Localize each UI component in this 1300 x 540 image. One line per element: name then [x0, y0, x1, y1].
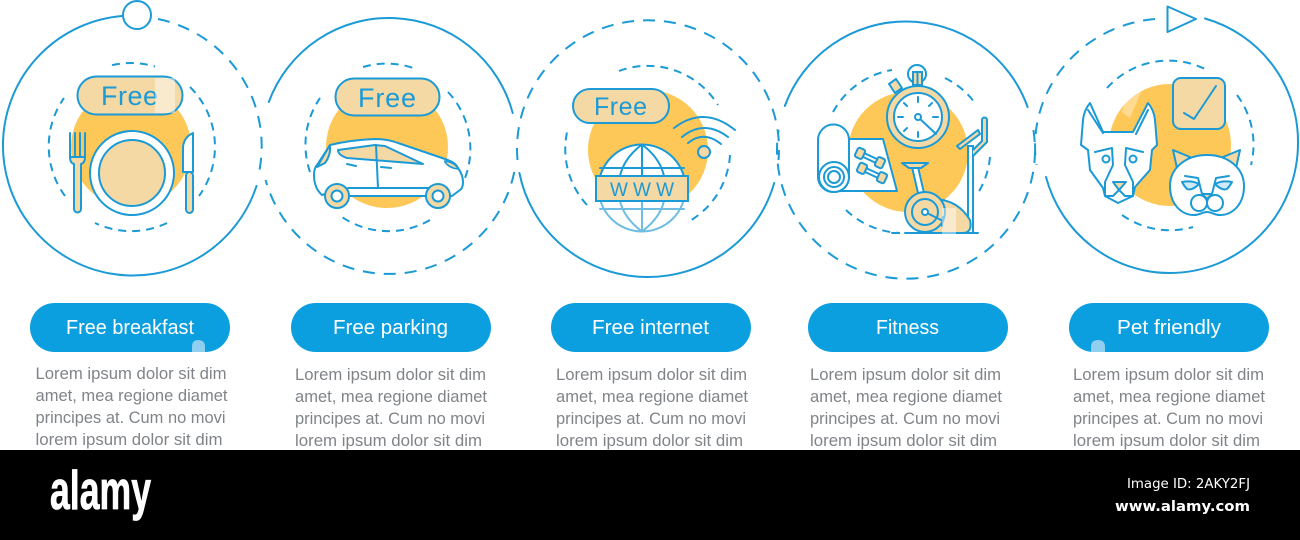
panel: free internet graphic	[517, 20, 779, 277]
body text 4: Lorem ipsum dolor sit dim	[810, 366, 1001, 384]
body text 4: amet, mea regione diamet	[810, 388, 1002, 406]
panel: free parking graphic	[266, 18, 514, 274]
body text 2: Lorem ipsum dolor sit dim	[295, 366, 486, 384]
label pill 1	[30, 303, 230, 352]
body text 1: Lorem ipsum dolor sit dim	[36, 365, 226, 383]
column: free internet	[551, 303, 753, 450]
icon: globe	[598, 144, 686, 232]
body text 3: amet, mea regione diamet	[556, 388, 748, 406]
free tag 3: Free	[594, 93, 647, 121]
icon: knife	[183, 133, 193, 213]
body text 3: lorem ipsum dolor sit dim	[556, 432, 743, 450]
icon: yoga mat	[818, 124, 897, 192]
yellow backdrop 1	[71, 87, 191, 207]
icon: stopwatch	[887, 65, 949, 148]
outer ring 5	[1035, 18, 1298, 273]
column: pet friendly	[1069, 303, 1270, 450]
body text 5: amet, mea regione diamet	[1073, 388, 1265, 406]
body text 2: amet, mea regione diamet	[295, 388, 487, 406]
outer ring 3	[517, 20, 779, 277]
www banner: WWW	[610, 180, 674, 201]
outer ring 2	[266, 18, 514, 274]
start marker circle	[123, 1, 151, 29]
yellow backdrop 5	[1109, 84, 1231, 206]
inner dashed ring 3	[565, 66, 730, 222]
free tag 1	[78, 76, 182, 114]
icon: fork	[70, 133, 85, 212]
icon: checkbox	[1173, 78, 1225, 129]
body text 5: principes at. Cum no movi	[1073, 410, 1263, 428]
column: free parking	[291, 303, 492, 450]
website: www.alamy.com	[1115, 499, 1250, 515]
body text 2: principes at. Cum no movi	[295, 410, 485, 428]
column: fitness	[808, 303, 1008, 450]
body text 4: lorem ipsum dolor sit dim	[810, 432, 997, 450]
free tag 2: Free	[358, 83, 416, 113]
inner dashed ring 5	[1107, 61, 1254, 230]
label pill 5	[1069, 303, 1269, 352]
label pill 3: Free internet	[592, 317, 709, 339]
yellow backdrop 2	[326, 86, 448, 208]
body text 1: lorem ipsum dolor sit dim	[36, 431, 222, 449]
free tag 1: Free	[101, 81, 158, 111]
yellow backdrop 3	[588, 90, 708, 210]
panel: free breakfast graphic	[3, 1, 262, 276]
body text 3: principes at. Cum no movi	[556, 410, 746, 428]
icon: cat	[1170, 150, 1244, 215]
inner dashed ring 2	[305, 64, 470, 231]
outer ring 4	[777, 21, 1035, 279]
label pill 3	[551, 303, 751, 352]
icon: wifi	[674, 117, 735, 158]
label pill 2: Free parking	[333, 317, 448, 339]
label pill 4	[808, 303, 1008, 352]
free tag 3	[573, 89, 669, 123]
outer ring 1	[3, 16, 262, 276]
label pill 5: Pet friendly	[1117, 317, 1221, 339]
logo: alamy	[50, 459, 151, 521]
icon: car	[314, 139, 463, 208]
icon: dog	[1081, 92, 1157, 203]
label pill 2	[291, 303, 491, 352]
footer bar	[0, 450, 1300, 540]
body text 2: lorem ipsum dolor sit dim	[295, 432, 482, 450]
free tag 2	[336, 78, 440, 116]
body text 1: principes at. Cum no movi	[36, 409, 226, 427]
yellow backdrop 4	[848, 92, 968, 212]
www banner	[596, 176, 688, 201]
body text 5: Lorem ipsum dolor sit dim	[1073, 366, 1264, 384]
inner dashed ring 4	[833, 70, 990, 233]
body text 4: principes at. Cum no movi	[810, 410, 1000, 428]
inner dashed ring 1	[49, 63, 215, 231]
icon: dumbbells	[854, 147, 888, 184]
icon: exercise bike	[892, 118, 987, 234]
image id: Image ID: 2AKY2FJ	[1127, 477, 1250, 492]
icon: plate	[90, 131, 174, 215]
label pill 4: Fitness	[876, 317, 939, 339]
end marker triangle	[1168, 6, 1196, 32]
body text 3: Lorem ipsum dolor sit dim	[556, 366, 747, 384]
label pill 1: Free breakfast	[66, 317, 194, 339]
panel: fitness graphic	[777, 21, 1035, 279]
body text 1: amet, mea regione diamet	[36, 387, 228, 405]
body text 5: lorem ipsum dolor sit dim	[1073, 432, 1260, 450]
column: free breakfast	[30, 303, 232, 449]
panel: pet friendly graphic	[1035, 6, 1298, 273]
